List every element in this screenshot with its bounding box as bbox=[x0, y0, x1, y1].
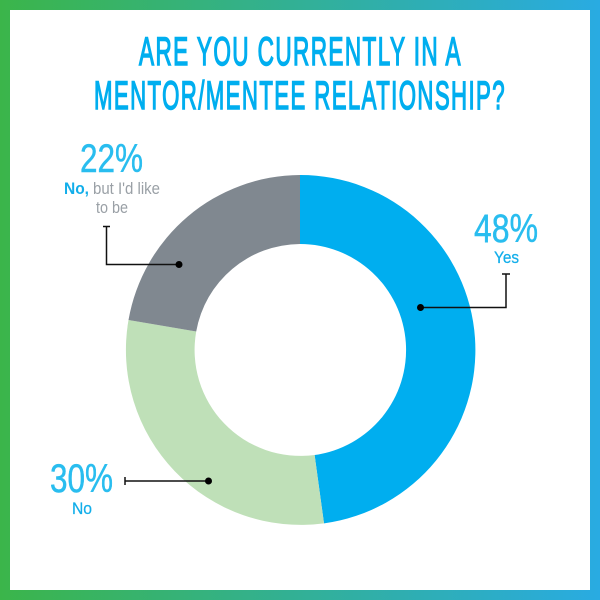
callout: 30% bbox=[50, 457, 212, 518]
segment: yes 48% bbox=[300, 175, 475, 523]
leader line bbox=[103, 226, 182, 268]
leader line bbox=[125, 477, 212, 485]
segment: no 30% bbox=[126, 320, 324, 525]
leader line bbox=[417, 274, 510, 311]
value 30%: 30% bbox=[50, 457, 113, 501]
segment: no but I'd like to be 22% bbox=[128, 175, 300, 332]
label: No, but I'd like to be: to be bbox=[96, 198, 128, 217]
label: Yes: Yes bbox=[494, 248, 519, 267]
label: No, but I'd like to be: but I'd like bbox=[93, 179, 160, 198]
title bbox=[94, 30, 506, 118]
donut chart bbox=[126, 175, 475, 525]
callout: 22% bbox=[64, 137, 182, 268]
value 48%: 48% bbox=[474, 207, 538, 251]
label: No, but I'd like to be: No, bbox=[64, 179, 89, 198]
label: No: No bbox=[72, 499, 92, 518]
value 22%: 22% bbox=[80, 137, 143, 181]
callout: 48% bbox=[417, 207, 538, 311]
